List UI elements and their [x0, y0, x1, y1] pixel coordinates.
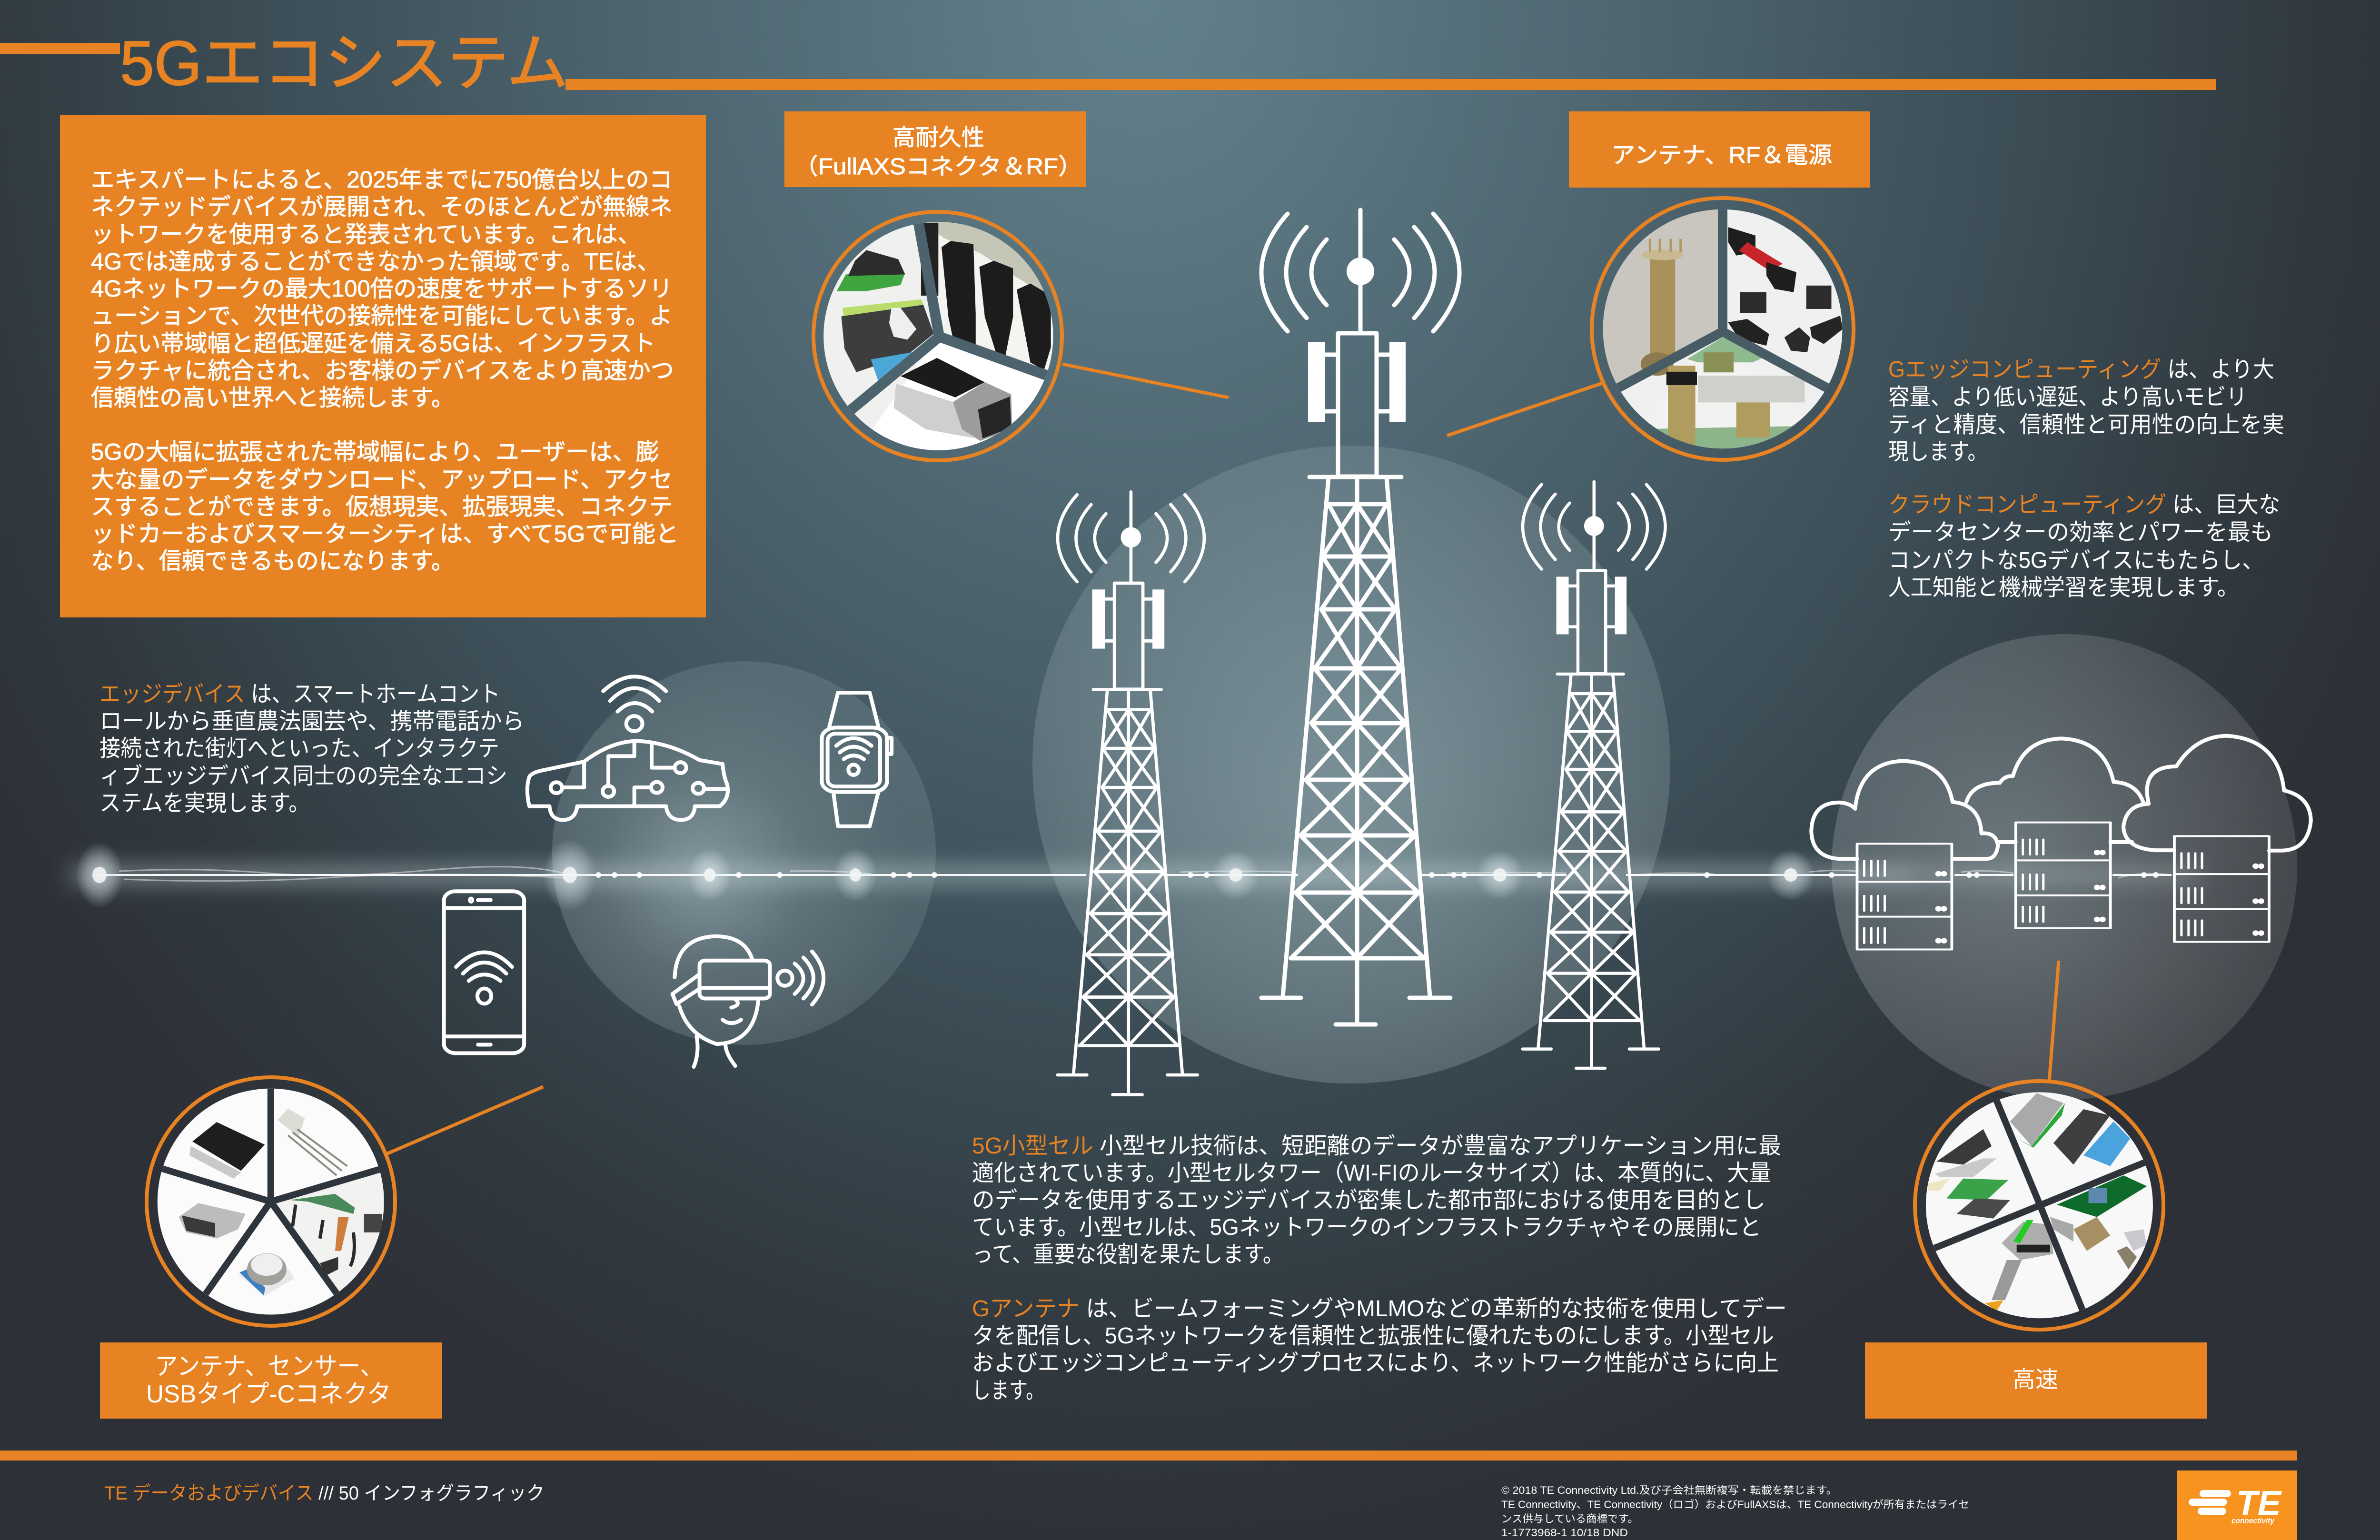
glow circle: towers: [1032, 446, 1670, 1083]
text: G edge computing and cloud computing: 人工知能と機械学習を実現します。: [1888, 575, 2239, 600]
panel: introduction: ラクチャに統合され、お客様のデバイスをより高速かつ: [91, 358, 674, 384]
footer legal text: ンス供与している商標です。: [1501, 1513, 1638, 1525]
footer legal text: [1501, 1484, 1969, 1539]
panel: introduction: ットワークを使用すると発表されています。これは、: [91, 222, 641, 248]
panel: introduction: 5Gの大幅に拡張された帯域幅により、ユーザーは、膨: [91, 439, 659, 465]
logo: TE Connectivity: [2177, 1470, 2297, 1540]
network light line: [71, 839, 2199, 911]
title: [0, 28, 2216, 98]
text: G edge computing and cloud computing: クラウドコンピューティング は、巨大な: [1888, 492, 2280, 517]
footer legal text: TE Connectivity、TE Connectivity（ロゴ）およびFullAXSは、TE Connectivityが所有またはライセ: [1501, 1499, 1969, 1510]
panel: introduction: 信頼性の高い世界へと接続します。: [91, 385, 454, 411]
panel: introduction: スすることができます。仮想現実、拡張現実、コネクテ: [91, 494, 673, 520]
label: antennas sensors USB: [100, 1342, 442, 1419]
tower: left: [1058, 492, 1204, 1094]
text: G edge computing and cloud computing: [1888, 357, 2284, 600]
panel: introduction: り広い帯域幅と超低遅延を備える5Gは、インフラスト: [91, 331, 655, 357]
footer rule: [0, 1451, 2297, 1461]
panel: introduction: 4Gネットワークの最大100倍の速度をサポートするソリ: [91, 276, 673, 302]
text: G edge computing and cloud computing: ティと精度、信頼性と可用性の向上を実: [1888, 412, 2284, 437]
text: 5G small cell and G antenna: って、重要な役割を果たします。: [972, 1242, 1284, 1267]
text: G edge computing and cloud computing: 現します。: [1888, 439, 1988, 465]
panel: introduction: なり、信頼できるものになります。: [91, 548, 454, 574]
text: 5G small cell and G antenna: ています。小型セルは、5Gネットワークのインフラストラクチャやその展開にと: [972, 1215, 1761, 1240]
label: high speed: [1865, 1342, 2207, 1419]
text: 5G small cell and G antenna: Gアンテナ は、ビームフォーミングやMLMOなどの革新的な技術を使用してデー: [972, 1296, 1787, 1321]
icon: connected car: [527, 676, 728, 820]
icon: smartphone: [444, 891, 524, 1053]
label: high durability: [784, 111, 1086, 187]
tower: center: [1261, 210, 1459, 1024]
footer title: TE データおよびデバイス /// 50 インフォグラフィック: [104, 1483, 545, 1504]
icon: smart watch: [822, 693, 892, 826]
label: high speed: 高速: [2013, 1367, 2058, 1392]
label: antennas sensors USB: アンテナ、センサー、: [155, 1353, 383, 1381]
panel: introduction: [60, 115, 706, 617]
connector line: high durability: [1062, 364, 1229, 397]
label: high durability: （FullAXSコネクタ＆RF）: [794, 154, 1082, 179]
icon: VR headset user: [673, 936, 823, 1067]
text: edge devices: エッジデバイス は、スマートホームコント: [99, 682, 500, 707]
panel: introduction: ューションで、次世代の接続性を可能にしています。よ: [91, 303, 673, 329]
photo circle: high durability connectors: [807, 212, 1081, 460]
tower: right: [1523, 482, 1666, 1068]
text: 5G small cell and G antenna: [972, 1133, 1787, 1403]
text: edge devices: ステムを実現します。: [99, 791, 310, 816]
text: 5G small cell and G antenna: のデータを使用するエッジデバイスが密集した都市部における使用を目的とし: [972, 1188, 1765, 1213]
text: edge devices: ィブエッジデバイス同士のの完全なエコシ: [99, 764, 507, 789]
glow circle: edge devices: [552, 661, 936, 1045]
text: G edge computing and cloud computing: データセンターの効率とパワーを最も: [1888, 520, 2273, 545]
connector line: edge devices: [387, 1087, 543, 1154]
label: high durability: 高耐久性: [892, 125, 984, 150]
photo circle: high speed: [1915, 1081, 2163, 1330]
title: 5Gエコシステム: [120, 28, 568, 98]
photo circle: antenna RF power: [1592, 198, 1854, 460]
logo: TE Connectivity: connectivity: [2231, 1516, 2275, 1525]
text: G edge computing and cloud computing: 容量、より低い遅延、より高いモビリ: [1888, 385, 2247, 410]
panel: introduction: 4Gでは達成することができなかった領域です。TEは、: [91, 249, 660, 275]
connector line: antenna: [1447, 382, 1605, 436]
panel: introduction: 大な量のデータをダウンロード、アップロード、アクセ: [91, 467, 673, 493]
icon: clouds and servers: [1811, 736, 2311, 950]
logo: TE Connectivity: TE: [2236, 1484, 2282, 1522]
label: antenna RF power: アンテナ、RF＆電源: [1611, 143, 1832, 168]
text: 5G small cell and G antenna: およびエッジコンピューティングプロセスにより、ネットワーク性能がさらに向上: [972, 1351, 1779, 1376]
text: edge devices: [99, 682, 525, 816]
text: G edge computing and cloud computing: Gエッジコンピューティング は、より大: [1888, 357, 2274, 382]
text: edge devices: ロールから垂直農法園芸や、携帯電話から: [99, 709, 525, 734]
panel: introduction: ネクテッドデバイスが展開され、そのほとんどが無線ネ: [91, 194, 673, 220]
connector line: high speed: [2049, 961, 2059, 1082]
text: 5G small cell and G antenna: 5G小型セル 小型セル技術は、短距離のデータが豊富なアプリケーション用に最: [972, 1133, 1781, 1159]
label: antenna RF power: [1569, 111, 1870, 188]
footer legal text: © 2018 TE Connectivity Ltd.及び子会社無断複写・転載を禁じます。: [1501, 1484, 1837, 1496]
label: antennas sensors USB: USBタイプ-Cコネクタ: [146, 1381, 391, 1408]
text: G edge computing and cloud computing: コンパクトな5Gデバイスにもたらし、: [1888, 548, 2264, 573]
text: 5G small cell and G antenna: します。: [972, 1378, 1044, 1403]
panel: introduction: エキスパートによると、2025年までに750億台以上のコ: [91, 167, 673, 193]
glow circle: cloud: [1832, 634, 2297, 1100]
text: 5G small cell and G antenna: 適化されています。小型セルタワー（WI-FIのルータサイズ）は、本質的に、大量: [972, 1161, 1771, 1186]
photo circle: antennas sensors USB: [147, 1077, 395, 1326]
text: 5G small cell and G antenna: タを配信し、5Gネットワークを信頼性と拡張性に優れたものにします。小型セル: [972, 1323, 1774, 1349]
panel: introduction: ッドカーおよびスマーターシティは、すべて5Gで可能と: [91, 521, 679, 547]
footer legal text: 1-1773968-1 10/18 DND: [1501, 1527, 1628, 1539]
text: edge devices: 接続された街灯へといった、インタラクテ: [99, 736, 499, 761]
